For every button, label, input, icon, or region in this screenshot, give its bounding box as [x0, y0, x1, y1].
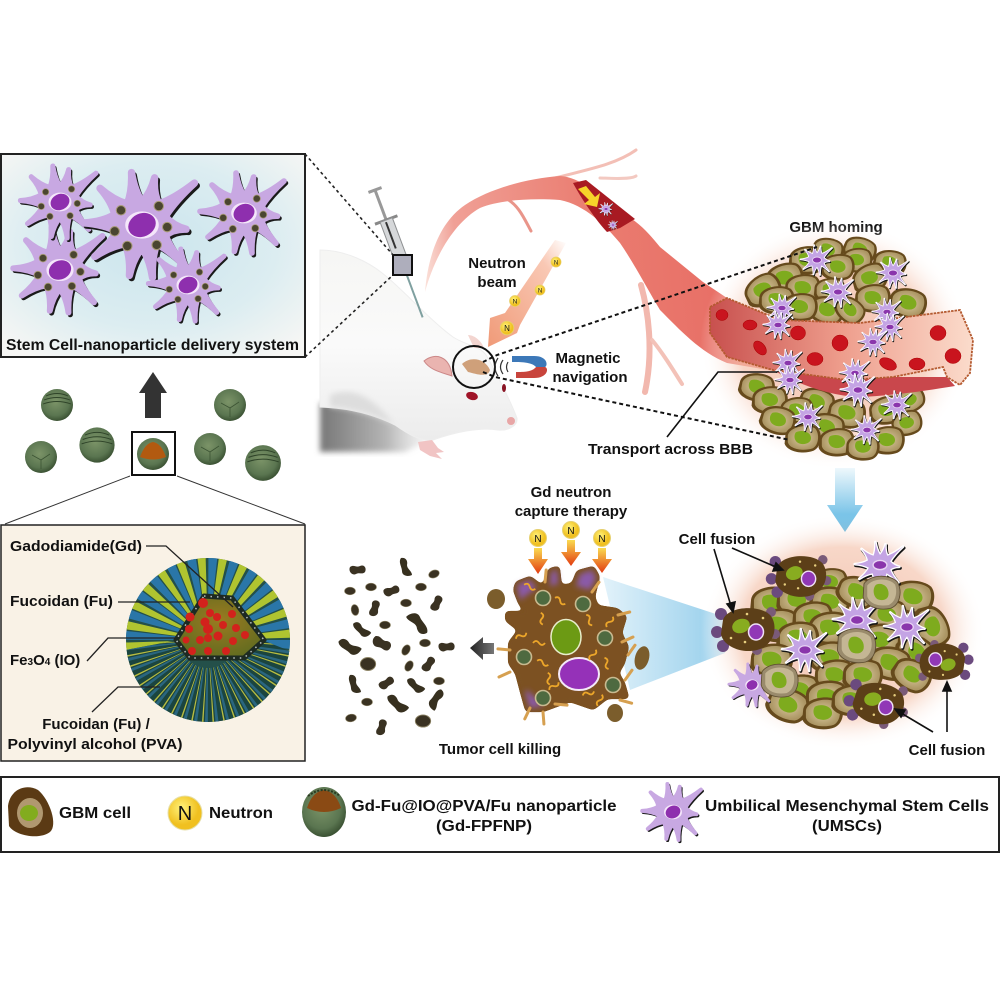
label: magnetic navigation: Magnetic	[555, 350, 621, 367]
label: transport across BBB: Transport across BBB	[588, 441, 753, 458]
tumor zoom circle on mouse head	[453, 346, 495, 388]
front beige cells	[761, 576, 900, 697]
dotted zoom lines from syringe box to panel	[305, 154, 393, 357]
magnet	[495, 356, 547, 378]
arrows: top cell fusion	[714, 548, 783, 612]
neutrons with arrows	[528, 522, 612, 574]
tumor after fusion	[701, 514, 985, 750]
red blood cells	[716, 310, 961, 373]
mouse	[320, 250, 517, 459]
nanoparticle group	[5, 389, 305, 524]
nose	[507, 417, 515, 425]
label: Gd neutron capture therapy: Gd neutron	[531, 484, 611, 501]
body	[320, 250, 517, 440]
legend: neutron icon	[168, 796, 202, 830]
legend: stem cell icon	[642, 784, 702, 841]
dotted zoom lines to tumor	[483, 247, 817, 440]
label: magnetic navigation	[552, 350, 628, 386]
stem cell 1	[20, 166, 98, 240]
cell body	[507, 568, 627, 710]
core cutaway	[176, 596, 264, 658]
legend: nanoparticle label: Gd-Fu@IO@PVA/Fu nanoparticle	[352, 798, 617, 815]
gadolinium dots	[182, 598, 249, 655]
label: neutron beam: Neutron	[468, 255, 526, 272]
stem cell 4	[13, 228, 104, 315]
purple lobes	[517, 570, 596, 708]
legend	[1, 777, 999, 852]
tumor with vessel: GBM homing	[700, 220, 973, 470]
glow	[701, 514, 985, 750]
ear	[424, 356, 452, 376]
squiggles	[515, 583, 614, 707]
stem cells homing	[763, 245, 912, 445]
legend: GBM cell label: GBM cell	[59, 805, 131, 822]
stem cells	[729, 542, 929, 707]
label: fucoidan / PVA: Polyvinyl alcohol (PVA)	[8, 736, 183, 753]
neutron beam	[488, 240, 566, 347]
killed tumor debris	[337, 558, 455, 737]
syringe	[364, 186, 434, 322]
legend: neutron icon: N	[178, 803, 192, 825]
yellow flow arrow	[578, 186, 600, 207]
lower tumor cells	[736, 370, 930, 461]
stem cell 2	[84, 172, 197, 280]
label: gadodiamide: Gadodiamide(Gd)	[10, 538, 142, 555]
arrow: up to stem cell panel	[139, 372, 167, 418]
feet	[418, 440, 444, 459]
purple nucleus	[559, 658, 599, 690]
panel: stem cell-nanoparticle delivery system	[1, 154, 305, 357]
sphere: layered nanoparticle	[126, 558, 290, 722]
label: fucoidan: Fucoidan (Fu)	[10, 593, 113, 610]
legend: nanoparticle icon	[302, 787, 346, 837]
label: fucoidan / PVA: Fucoidan (Fu) /	[42, 716, 151, 733]
green nucleus	[551, 620, 581, 654]
legend: GBM cell icon	[8, 787, 53, 836]
stem cell 3	[200, 173, 286, 255]
blood vessel	[425, 176, 780, 372]
legend: stem cell label: Umbilical Mesenchymal Stem Cells	[705, 798, 989, 815]
loose cells	[487, 589, 652, 722]
legend: stem cell label: (UMSCs)	[812, 818, 882, 835]
label: fucoidan / PVA	[8, 716, 183, 753]
panel caption: Stem Cell-nanoparticle delivery system	[6, 337, 299, 354]
label: Gd neutron capture therapy	[515, 484, 628, 520]
legend: neutron label: Neutron	[209, 805, 273, 822]
eye	[465, 391, 479, 401]
label: neutron beam: beam	[477, 274, 517, 291]
light cone from tumor to cell	[603, 577, 725, 690]
fusion cells	[711, 555, 974, 733]
rods	[498, 570, 638, 724]
legend: stem cell label	[705, 798, 989, 835]
label: cell fusion top: Cell fusion	[679, 531, 755, 548]
leader lines	[87, 546, 233, 712]
label: magnetic navigation: navigation	[552, 369, 628, 386]
shadow	[320, 403, 440, 452]
tumor cells	[750, 568, 955, 729]
leader line: transport across BBB	[667, 372, 777, 437]
open vessel	[710, 298, 973, 397]
nanoparticles inside	[516, 590, 620, 706]
upper tumor cells	[739, 232, 930, 330]
label: GBM homing: GBM homing	[789, 219, 883, 236]
label: Gd neutron capture therapy: capture therapy	[515, 503, 628, 520]
vessel cutaway with arrow	[573, 180, 635, 232]
label: iron oxide: Fe3O4 (IO)	[10, 652, 80, 669]
arrow: blue down	[827, 468, 863, 532]
glow	[700, 220, 970, 470]
legend: nanoparticle label	[352, 798, 617, 835]
label: cell fusion bottom: Cell fusion	[909, 742, 985, 759]
stem cell 5	[148, 249, 226, 323]
blood vessel branches	[505, 150, 682, 392]
legend: nanoparticle label: (Gd-FPFNP)	[436, 818, 532, 835]
label: neutron beam	[468, 255, 526, 291]
label: tumor cell killing: Tumor cell killing	[439, 741, 561, 758]
arrows: bottom cell fusion	[895, 682, 951, 732]
tumor cell with capture therapy	[487, 568, 652, 724]
arrow: left to killed cells	[470, 637, 494, 660]
panel: nanoparticle structure	[1, 525, 305, 761]
